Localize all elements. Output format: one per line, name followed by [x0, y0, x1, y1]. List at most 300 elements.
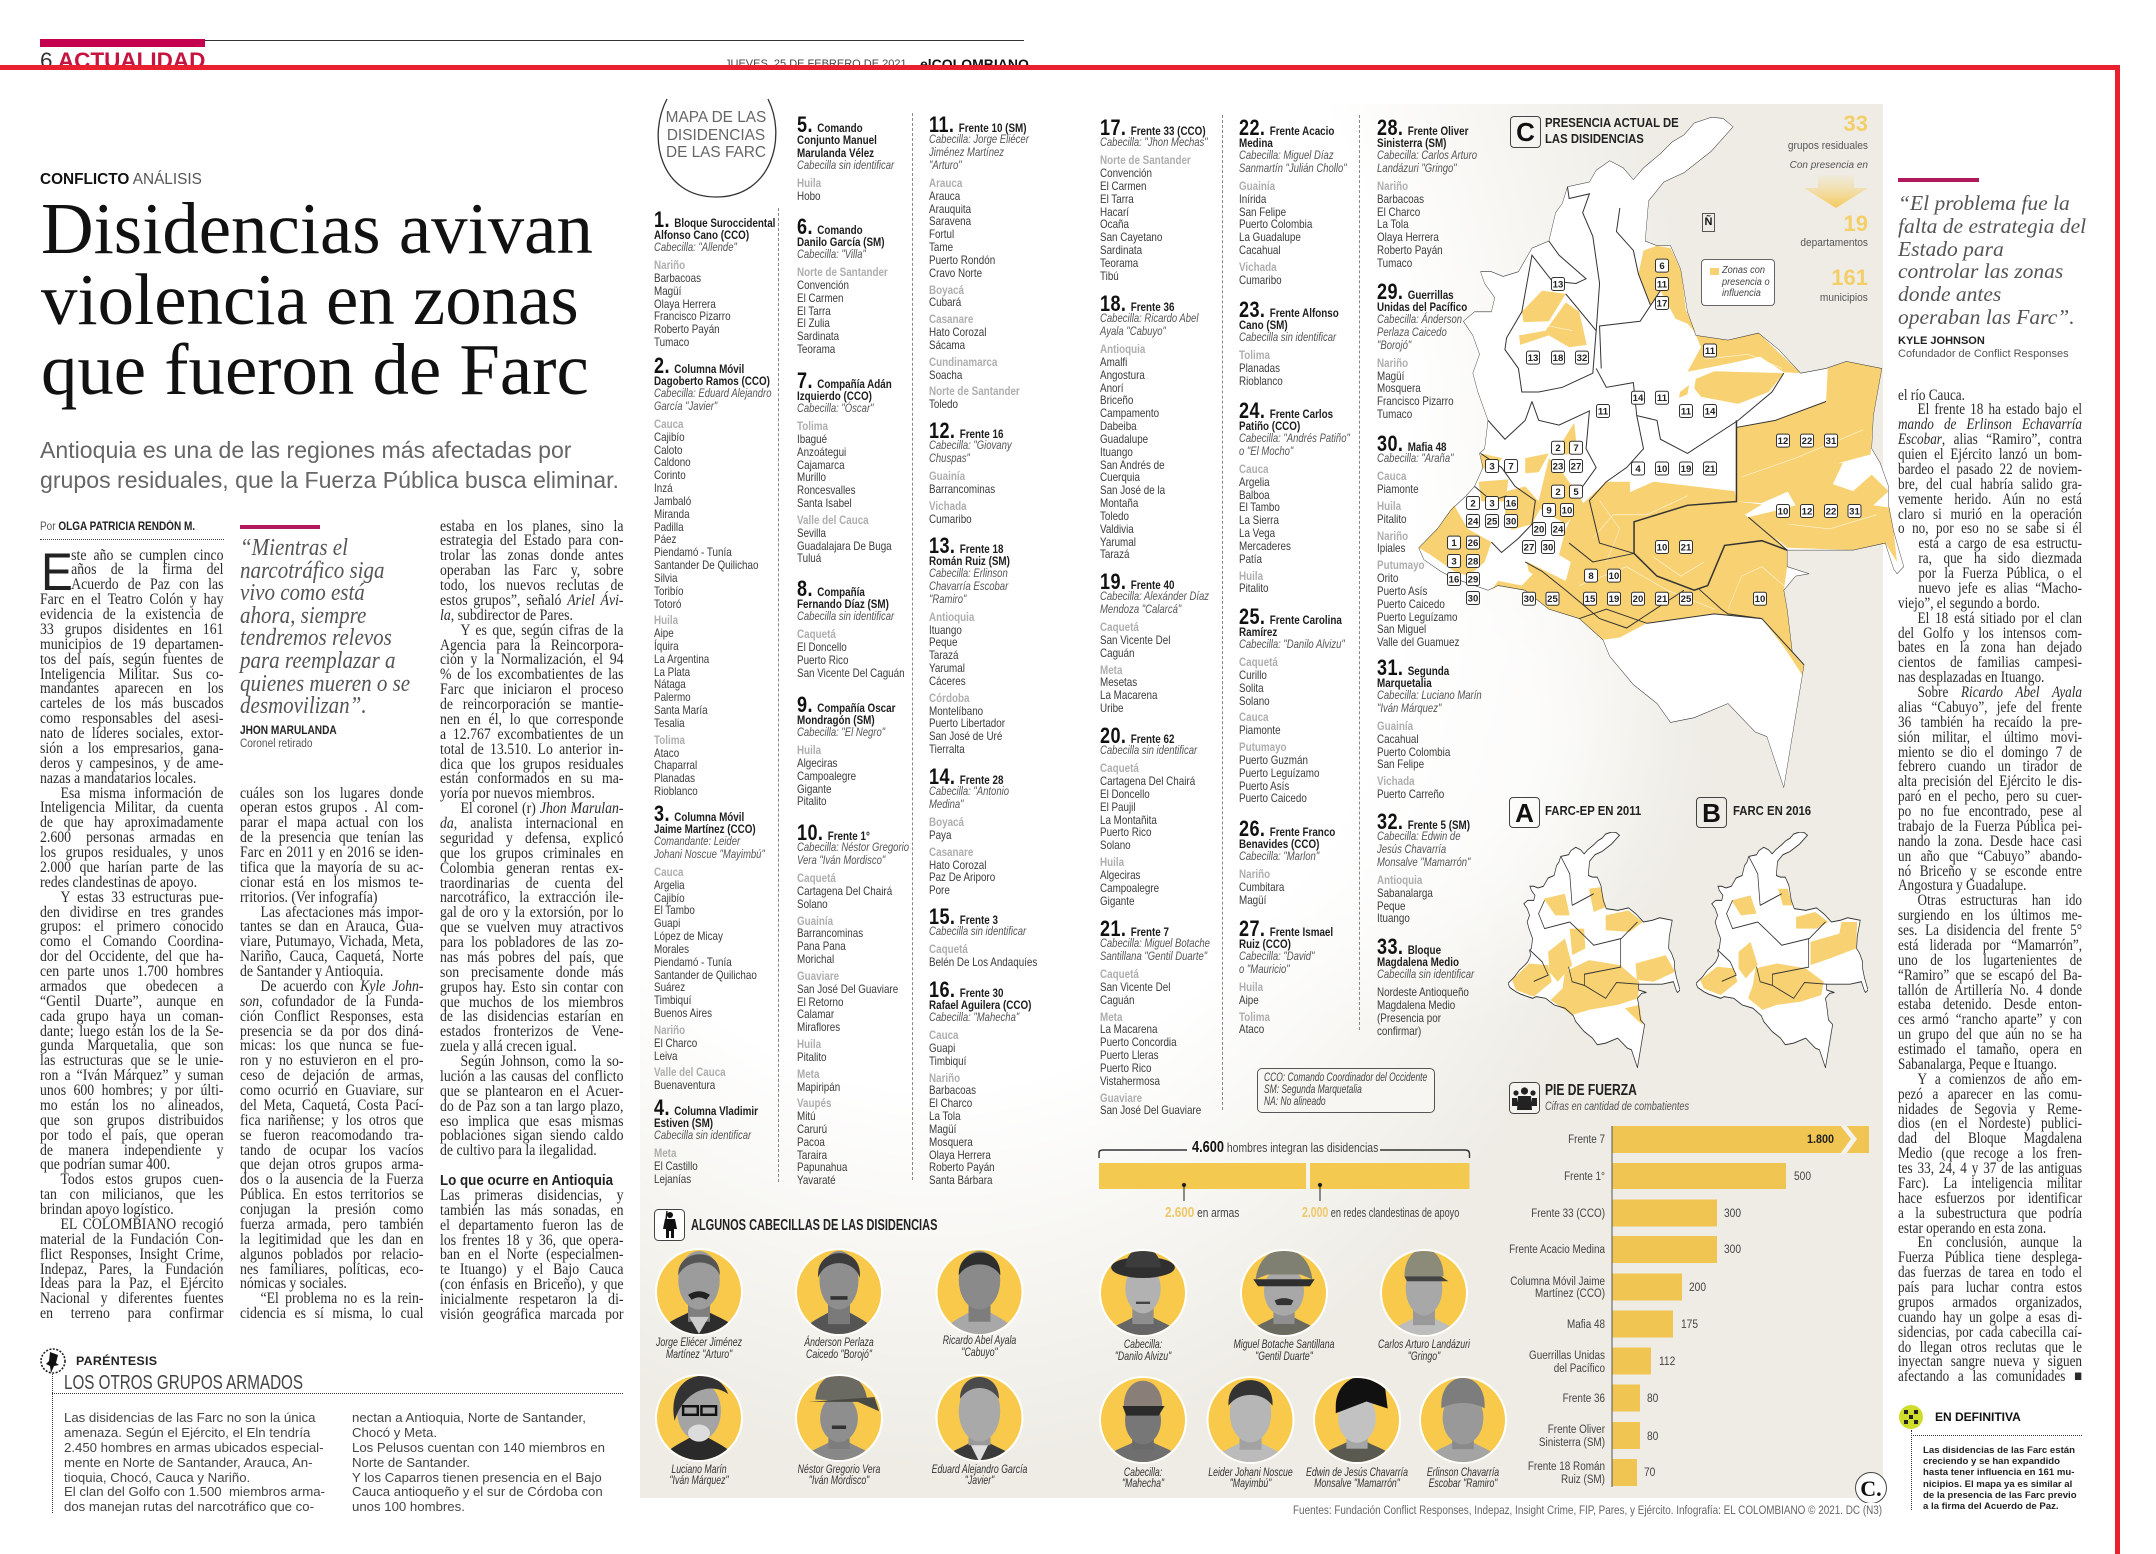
group 16: El Charco [929, 1096, 972, 1110]
white rivers [1525, 326, 1877, 609]
map C number labels: 22 [1826, 506, 1836, 517]
group 25: Putumayo [1239, 740, 1287, 754]
article column 1: Inteligencia Militar, da cuenta [40, 799, 224, 816]
map C number labels: 10 [1755, 594, 1765, 605]
group 31: Cacahual [1377, 732, 1419, 746]
group 19: 19. Frente 40 [1100, 569, 1174, 594]
quote bar [240, 525, 320, 529]
caption: Caicedo "Borojó" [806, 1349, 872, 1361]
article column 4: miento se dio el domingo 7 de [1898, 744, 2082, 761]
key text: SM: Segunda Marquetalia [1264, 1083, 1362, 1096]
group 7: Tuluá [797, 551, 821, 565]
group 11: Saravena [929, 214, 971, 228]
group 17: Hacarí [1100, 205, 1129, 219]
article column 3: que muchos de los miembros [440, 994, 624, 1011]
map C number labels: 30 [1524, 594, 1534, 605]
group 2: Caldono [654, 455, 691, 469]
heading: mapa de las disidencias [658, 98, 776, 198]
group 33: Magdalena Medio [1377, 955, 1459, 969]
group 33: Cabecilla sin identificar [1377, 968, 1474, 981]
chart title: PIE DE FUERZA [1545, 1081, 1637, 1098]
group 18: Montaña [1100, 496, 1138, 510]
group 30: Putumayo [1377, 558, 1425, 572]
article column 4: En conclusión, aunque la [1918, 1234, 2082, 1251]
group 10: Morichal San José Del Guaviare [797, 952, 898, 996]
article column 4: pezó a aparecer en las comu- [1898, 1086, 2082, 1103]
caption: Cabecilla: [1124, 1467, 1162, 1479]
map C number labels: 21 [1705, 464, 1716, 475]
group 12: Guainía [929, 469, 965, 483]
map C number labels: 18 [1553, 353, 1564, 364]
map C number labels: 10 [1657, 542, 1667, 553]
article column 3: para los pobladores de las zo- [440, 934, 624, 951]
article column 2: “El problema no es la rein- [260, 1290, 424, 1307]
group 29: Nariño [1377, 356, 1408, 370]
article column 3: el departamento fueron las de [440, 1217, 624, 1234]
article column 1: nazas a mandatarios locales. [40, 770, 197, 787]
legend text: Zonas con [1722, 265, 1765, 276]
group 18: Antioquia [1100, 342, 1145, 356]
letter badge A [1509, 797, 1540, 828]
article column 1: 33 grupos disidentes en 161 [40, 621, 224, 638]
article column 2: tando de ocupar los vacíos [240, 1142, 424, 1159]
panel: paréntesis, otros grupos armados [40, 1348, 623, 1514]
group 9: Campoalegre [797, 769, 856, 783]
subheading [40, 437, 619, 493]
group 18: Angostura [1100, 368, 1145, 382]
article column 2: cuáles son los lugares donde [240, 785, 424, 802]
group 32: Ituango [1377, 911, 1410, 925]
group 1: Francisco Pizarro [654, 309, 731, 323]
article column 2: Farc en 2011 y en 2016 se iden- [240, 844, 424, 861]
group 18: Valdivia [1100, 522, 1134, 536]
group 14: Paya Hato Corozal [929, 828, 986, 872]
group 4: 4. Columna Vladimir [654, 1095, 758, 1120]
article column 2: la legitimidad que les dan en [240, 1231, 424, 1248]
group 4: Meta [654, 1146, 676, 1160]
group 26: Nariño [1239, 867, 1270, 881]
map C: presencia actual de las disidencias [1390, 90, 1920, 830]
heading text: FARC EN 2016 [1733, 804, 1811, 818]
article column 3: son precisamente donde más [440, 964, 624, 981]
article column 1: los grupos residuales, y unos [40, 844, 224, 861]
quote text: desmovilizan”. [240, 693, 367, 719]
article column 1 [40, 547, 224, 1322]
portrait: Jorge Eliécer Jiménez [655, 1248, 743, 1344]
article column 4 [1898, 389, 2082, 1385]
group 9: Gigante [797, 782, 831, 796]
group 11: Tame [929, 240, 953, 254]
group 13: Peque [929, 635, 957, 649]
group 28 [1377, 122, 1477, 270]
map C number labels: 4 [1635, 464, 1641, 475]
article column 3: lución a las causas del conflicto [440, 1068, 624, 1085]
caption: "Iván Mordisco" [809, 1475, 870, 1487]
map C number labels: 19 [1609, 594, 1619, 605]
map C number labels: 11 [1657, 393, 1668, 404]
group 3: Valle del Cauca [654, 1065, 726, 1079]
article column 2: cidencia es sí misma, lo cual [240, 1305, 424, 1322]
group 6: Cabecilla: "Villa" [797, 248, 866, 261]
byline rule [40, 539, 224, 540]
article column 1: brindan apoyo logístico. [40, 1201, 174, 1218]
group 18: Campamento [1100, 406, 1159, 420]
group 3: Jaime Martínez (CCO) [654, 822, 756, 836]
group 13: Tarazá [929, 648, 959, 662]
article column 4: a la subestructura que podría [1898, 1205, 2082, 1222]
map C number labels: 16 [1506, 498, 1516, 509]
icon: people [1510, 1082, 1540, 1114]
map C number labels: 10 [1562, 505, 1572, 516]
article column 2: Nariño, Cauca, Caquetá, Norte [240, 948, 424, 965]
group 21: Caguán La Macarena [1100, 993, 1157, 1036]
group 13: Cabecilla: Erlinson [929, 567, 1008, 580]
title [41, 188, 593, 410]
group 13: "Ramiro" [929, 593, 966, 606]
group 17: Cabecilla: "Jhon Mechas" [1100, 136, 1208, 149]
article column 2: fuerza armada, pero también [240, 1216, 424, 1233]
portrait: Néstor Gregorio Vera [795, 1373, 883, 1468]
portrait: Leider Johani Noscue [1206, 1376, 1294, 1472]
group 14: Pore [929, 883, 950, 897]
group 1: Cabecilla: "Allende" [654, 241, 737, 254]
country outline [1419, 117, 1904, 788]
group 29: Perlaza Caicedo [1377, 326, 1447, 339]
heading text: PRESENCIA ACTUAL DE [1545, 116, 1679, 130]
group 20: Caquetá [1100, 761, 1139, 775]
article column 4: tallón de Artillería No. 4 donde [1898, 982, 2082, 999]
divider: list columns [1222, 115, 1223, 1110]
group 2 [654, 353, 772, 798]
group 17: Norte de Santander [1100, 153, 1191, 167]
text column right: nectan a Antioquia, Norte de Santander, [352, 1410, 586, 1425]
article column 2: viare, Putumayo, Vichada, Meta, [240, 933, 424, 950]
icon: pin in dotted circle [40, 1348, 66, 1374]
map C number labels: 11 [1598, 406, 1609, 417]
caption: Luciano Marín [671, 1464, 727, 1476]
group 31: Marquetalia [1377, 676, 1432, 690]
article column 2: ron y no estuvieron en el pro- [240, 1052, 424, 1069]
group 10: 10. Frente 1° [797, 820, 870, 845]
group 17: El Carmen [1100, 179, 1146, 193]
portrait: Ánderson Perlaza [795, 1248, 883, 1344]
article column 3: nen en él, lo que corresponde [440, 711, 624, 728]
article column 4: trabajo de la Fuerza Pública pei- [1898, 818, 2082, 835]
subheading: grupos residuales, que la Fuerza Pública busca eliminar. [40, 467, 619, 493]
article column 1: como responsables del asesi- [40, 710, 224, 727]
values: 175 [1681, 1318, 1698, 1331]
text column right: Norte de Santander. [352, 1455, 470, 1470]
text column right: Y los Caparros tienen presencia en el Bajo [352, 1470, 602, 1484]
group 16 [929, 977, 1031, 1187]
group 11: "Arturo" [929, 159, 962, 172]
group 25: Caquetá [1239, 655, 1278, 669]
article column 4: estaba detenido. Desde enton- [1898, 996, 2082, 1013]
group 18: Briceño [1100, 393, 1133, 407]
group 12: 12. Frente 16 [929, 418, 1003, 443]
article column 3: Y es que, según cifras de la [460, 622, 624, 639]
group 30: Huila [1377, 499, 1401, 513]
group 11: Sácama Soacha Toledo [929, 338, 965, 411]
icon: soldier silhouette [654, 1209, 685, 1241]
article column 4: ra, que ha sido diezmada [1918, 550, 2082, 567]
group 11: Jiménez Martínez [929, 146, 1004, 159]
group 21: Guaviare [1100, 1091, 1142, 1105]
group 21: San Vicente Del [1100, 980, 1170, 994]
article column 2: dos o la ausencia de la Fuerza [240, 1171, 424, 1188]
stat label: municipios [1820, 292, 1868, 304]
text column right [352, 1410, 605, 1514]
group 2: Inzá [654, 481, 673, 495]
group 1 [654, 207, 775, 349]
group 18: Dabeiba [1100, 419, 1137, 433]
group 10: Solano Barrancominas [797, 897, 863, 940]
divider: list columns [778, 208, 779, 1182]
group 6: El Tarra [797, 304, 831, 318]
group 4 [654, 1095, 758, 1186]
caption: Escobar "Ramiro" [1429, 1478, 1498, 1490]
article column 4: dad del Bloque Magdalena [1898, 1130, 2082, 1147]
group 10: Cabecilla: Néstor Gregorio [797, 841, 909, 854]
article column 4: alias “Cabuyo”, jefe del frente [1898, 699, 2082, 716]
map C number labels [1440, 255, 1870, 610]
group 19: Caguán Mesetas [1100, 646, 1137, 689]
article column 2: conjugan la presión como [240, 1201, 424, 1218]
article column 1: EL COLOMBIANO recogió [61, 1216, 224, 1233]
article column 4: do llegan otros reclutas que le [1898, 1339, 2082, 1356]
legend text: influencia [1722, 288, 1761, 299]
caption: Miguel Botache Santillana [1234, 1339, 1335, 1351]
article column 1: Nacional y diferentes fuentes [40, 1290, 224, 1307]
caption: "Cabuyo" [961, 1347, 998, 1359]
group 32: Antioquia [1377, 873, 1422, 887]
letter badge B [1696, 797, 1727, 828]
group 3: Cajibío [654, 891, 685, 905]
article column 4: país para luchar contra estos [1898, 1279, 2082, 1296]
portrait: Luciano Marín [655, 1374, 743, 1470]
group 16: Roberto Payán [929, 1160, 995, 1174]
article column 1: deros y campesinos, y de ame- [40, 755, 224, 772]
category labels: Mafia 48 [1567, 1318, 1605, 1331]
article column 1: Indepaz, Pares, la Fundación [40, 1261, 224, 1278]
article column 4: febrero cuando un tirador de [1898, 758, 2082, 775]
group 2: Rioblanco [654, 784, 698, 798]
article column 3: do de Paz son a tan largo plazo, [440, 1098, 624, 1115]
text column right: Los Pelusos cuentan con 140 miembros en [352, 1440, 605, 1455]
category labels: Columna Móvil Jaime [1510, 1275, 1605, 1288]
quote text: “El problema fue la [1898, 191, 2070, 215]
map C number labels: 26 [1468, 538, 1478, 549]
kicker: CONFLICTO ANÁLISIS [40, 171, 202, 188]
group 24: Patiño (CCO) [1239, 419, 1300, 433]
group 20: Huila [1100, 855, 1124, 869]
article column 3: también las más sonadas, en [440, 1202, 624, 1219]
group 28: El Charco [1377, 205, 1420, 219]
article column 4: das fuerzas de tarea en todo el [1898, 1264, 2082, 1281]
article column 4: un año que “Cabuyo” abando- [1898, 848, 2082, 865]
group 23: Rioblanco [1239, 374, 1283, 388]
label: 2.000 en redes: 2.000 en redes clandestinas de apoyo [1302, 1203, 1459, 1220]
quote attribution: Cofundador de Conflict Responses [1898, 348, 2069, 360]
caption: Monsalve "Mamarrón" [1314, 1478, 1400, 1490]
group 2: La Plata [654, 665, 690, 679]
map C number labels: 11 [1681, 406, 1692, 417]
group 7 [797, 368, 892, 565]
quote text [238, 535, 410, 719]
group 13: Antioquia [929, 610, 974, 624]
article column 2: De acuerdo con Kyle John- [260, 978, 423, 995]
group 4: Cabecilla sin identificar [654, 1129, 751, 1142]
group 16: Nariño [929, 1071, 960, 1085]
group 22: Puerto Colombia [1239, 217, 1312, 231]
group 13: San José de Uré [929, 729, 1002, 743]
group 29: Mosquera [1377, 381, 1421, 395]
list column A: groups 1 to 4 [654, 207, 775, 1186]
article column 3: trolar las zonas donde antes [440, 547, 624, 564]
article column 3: dica que los grupos residuales [440, 756, 624, 773]
article column 1: Inteligencia Militar. Sus co- [40, 666, 224, 683]
article column 4: Sabanalarga, Peque e Ituango. [1898, 1056, 2057, 1073]
portrait: Eduard Alejandro García [936, 1374, 1024, 1470]
summary text: nicipios. El mapa ya es similar al [1923, 1479, 2072, 1490]
group 3: Johani Noscue "Mayimbú" [654, 848, 765, 861]
group 22 [1239, 122, 1347, 287]
article column 1: ron a “Iván Márquez” y suman [40, 1067, 224, 1084]
list column D: groups 17 to 21 [1100, 115, 1210, 1117]
group 16: 16. Frente 30 [929, 977, 1003, 1002]
group 30: Puerto Caicedo [1377, 597, 1445, 611]
group 19: Cabecilla: Alexánder Díaz [1100, 590, 1209, 603]
article column 4: el río Cauca. [1898, 387, 1965, 404]
group 3: Suárez [654, 980, 685, 994]
group 7: Izquierdo (CCO) [797, 389, 872, 403]
group 11: 11. Frente 10 (SM) [929, 112, 1026, 137]
group 8: San Vicente Del Caguán [797, 666, 905, 680]
values: 500 [1794, 1170, 1811, 1183]
group 24: Argelia [1239, 475, 1270, 489]
article column 3: inicialmente respetaron la di- [440, 1291, 624, 1308]
portrait: Danilo Alvizu [1099, 1248, 1187, 1343]
group 20: Cabecilla sin identificar [1100, 744, 1197, 757]
group 3: Nariño [654, 1023, 685, 1037]
article column 4: Medio (que recoge a los fren- [1898, 1145, 2082, 1162]
group 9 [797, 692, 896, 808]
article column 4: grupos armados organizados, [1898, 1294, 2082, 1311]
text column right: unos 100 hombres. [352, 1499, 465, 1514]
text column right: Cauca antioqueño y el sur de Córdoba con [352, 1484, 603, 1499]
bar segment: en armas [1099, 1163, 1306, 1189]
article column 4: quien el Ejército lanzó un bom- [1898, 446, 2082, 463]
group 2: Chaparral [654, 758, 697, 772]
group 1: Tumaco [654, 335, 689, 349]
map C number labels: 20 [1633, 594, 1643, 605]
group 26 [1239, 823, 1335, 907]
header: top rule [205, 40, 1024, 41]
map C number labels: 9 [1546, 505, 1552, 516]
group 27: o "Mauricio" [1239, 963, 1290, 976]
group 2: Cabecilla: Eduard Alejandro [654, 387, 772, 400]
map C number labels: 25 [1681, 594, 1692, 605]
group 21: 21. Frente 7 [1100, 916, 1169, 941]
group 8 [797, 576, 905, 680]
caption: Eduard Alejandro García [932, 1464, 1028, 1476]
group 2: Tolima [654, 733, 685, 747]
article column 3: de cultivo para la ilegalidad. [440, 1142, 597, 1159]
logo: El Colombiano C: C. [1860, 1476, 1882, 1501]
map C number labels: 25 [1487, 516, 1498, 527]
key text: NA: No alineado [1264, 1095, 1326, 1108]
dotted side rule [52, 1374, 53, 1513]
group 23: 23. Frente Alfonso [1239, 297, 1339, 322]
article column 3: operaban las Farc y, sobre [440, 562, 624, 579]
group 21 [1100, 923, 1210, 1117]
group 23: Tolima [1239, 348, 1270, 362]
group 9: Algeciras [797, 756, 837, 770]
article column 1: Y estas 33 estructuras pue- [61, 889, 224, 906]
letter badge B: B [1702, 798, 1721, 828]
values: 80 [1647, 1430, 1658, 1443]
article column 4: sidencias, por cada cabecilla caí- [1898, 1324, 2082, 1341]
portrait: Edwin de Jesús Chavarría [1313, 1375, 1401, 1470]
article column 3: que los grupos criminales en [440, 845, 624, 862]
article column 3: Lo que ocurre en Antioquia [440, 1172, 613, 1189]
article column 4: cientos de familias campesi- [1898, 654, 2082, 671]
compass N [1702, 213, 1715, 232]
group 6: Danilo García (SM) [797, 235, 884, 249]
group 6: El Carmen [797, 291, 843, 305]
map C number labels: 29 [1468, 574, 1478, 585]
group 24: Patía Pitalito [1239, 552, 1269, 595]
group 6: 6. Comando [797, 214, 863, 239]
group 11: Arauca [929, 189, 960, 203]
article column 4: bardeo el pasado 22 de noviem- [1898, 461, 2082, 478]
category labels: Frente 18 Román [1528, 1460, 1605, 1473]
group 25: 25. Frente Carolina [1239, 604, 1342, 629]
article column 3: gal de oro y la extorsión, por lo [440, 904, 624, 921]
red frame: vertical [2115, 65, 2120, 1554]
text column left: Las disidencias de las Farc no son la única [64, 1410, 315, 1425]
key: abbreviations [1257, 1068, 1435, 1113]
title: Disidencias avivan [41, 188, 593, 269]
map C number labels: 11 [1657, 279, 1668, 290]
group 33: (Presencia por [1377, 1011, 1441, 1025]
group 25: Puerto Leguízamo [1239, 766, 1319, 780]
map C number labels: 12 [1778, 436, 1788, 447]
pull quote: Jhon Marulanda [238, 525, 410, 750]
group 8: Puerto Rico [797, 653, 848, 667]
caption: Néstor Gregorio Vera [798, 1464, 881, 1476]
group 29 [1377, 286, 1467, 421]
group 17: Convención [1100, 166, 1152, 180]
group 17: San Cayetano [1100, 230, 1162, 244]
group 1: Barbacoas [654, 271, 701, 285]
group 29: Unidas del Pacífico [1377, 300, 1467, 314]
group 14: 14. Frente 28 [929, 764, 1003, 789]
group 18: Ituango [1100, 445, 1133, 459]
dotted side rule [1911, 1430, 1912, 1510]
quote text: quienes mueren o se [240, 671, 410, 697]
article column 4: alta precisión del Ejército le dis- [1898, 773, 2082, 790]
group 18 [1100, 291, 1199, 561]
group 9: 9. Compañía Oscar [797, 692, 895, 717]
category labels: del Pacífico [1554, 1362, 1605, 1375]
group 19: Caquetá [1100, 620, 1139, 634]
group 27: Huila [1239, 980, 1263, 994]
map C number labels: 30 [1506, 516, 1516, 527]
group 1: Roberto Payán [654, 322, 720, 336]
article column 1: 2.000 que harían parte de las [40, 859, 224, 876]
group 7: Cabecilla: "Óscar" [797, 402, 874, 415]
